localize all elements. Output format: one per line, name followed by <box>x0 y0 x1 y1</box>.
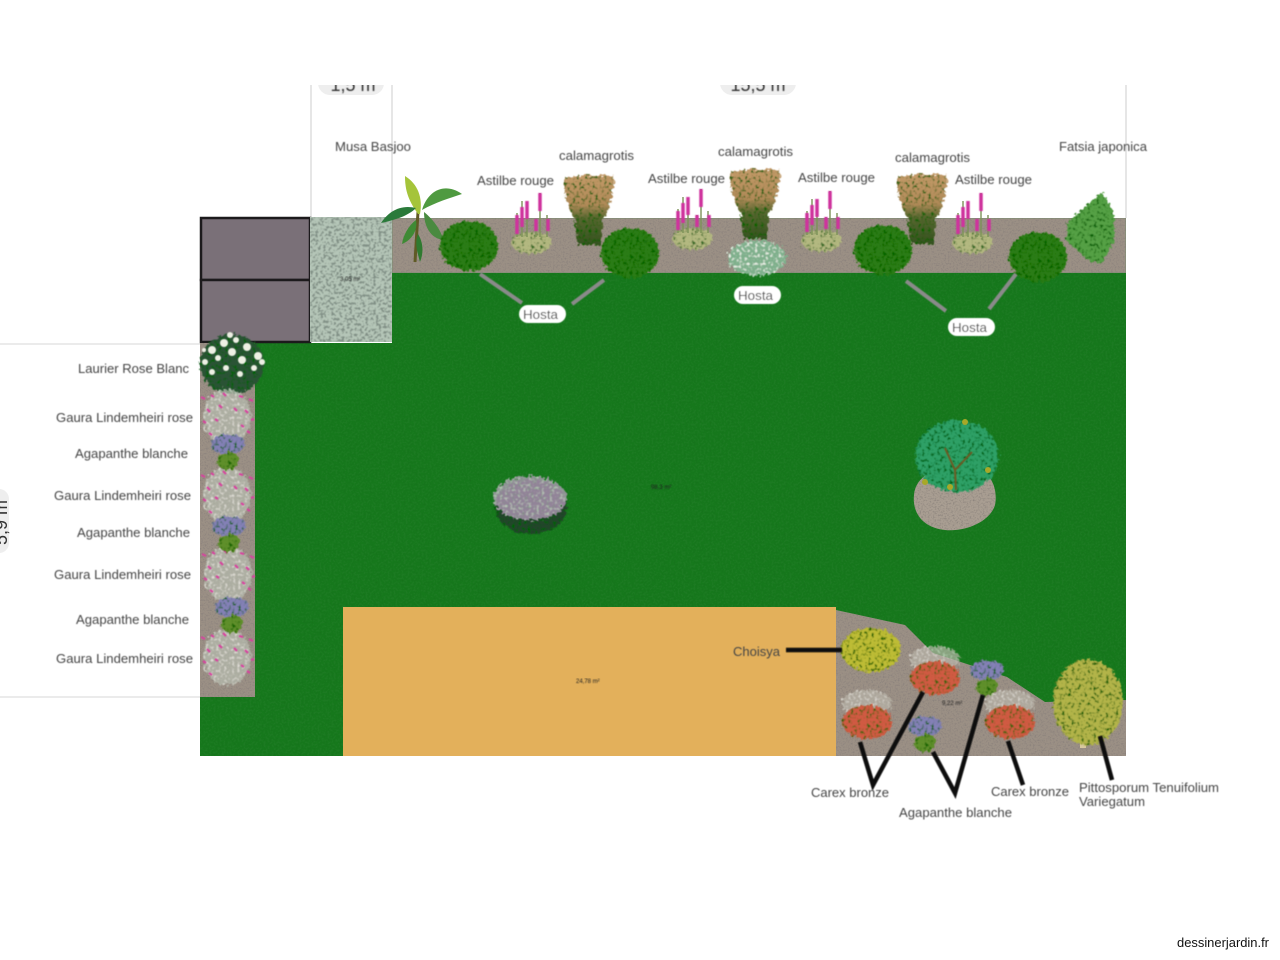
lower right gravel bed: 9,22 m² <box>942 701 962 707</box>
panel: terrace: 24,78 m² <box>576 679 600 685</box>
hosta label 1 <box>519 305 566 323</box>
dimension lines and labels <box>0 70 1126 697</box>
icon: carex 2 <box>910 646 960 695</box>
icon: carex 1 <box>842 690 892 739</box>
icon: astilbe 4 <box>952 193 992 254</box>
black leader lines <box>786 650 1112 793</box>
watermark: dessinerjardin.fr <box>1177 936 1269 950</box>
panel: pebble path <box>310 217 392 342</box>
plant name labels: Astilbe rouge <box>798 170 875 185</box>
icon: laurier rose <box>200 332 265 394</box>
icon: pale hosta <box>728 240 786 276</box>
icon: astilbe 2 <box>672 189 712 250</box>
plant name labels: Choisya <box>733 644 781 659</box>
dimension lines and labels: 15,5 m <box>730 75 786 95</box>
icon: agapanthe 5 <box>908 716 942 752</box>
hosta label 2 <box>734 286 781 304</box>
top gravel bed <box>392 218 1126 273</box>
plant name labels: Gaura Lindemheiri rose <box>54 567 191 582</box>
plant name labels: Pittosporum Tenuifolium <box>1079 780 1219 795</box>
icon: agapanthe 3 <box>215 597 249 633</box>
plant name labels: Variegatum <box>1079 794 1145 809</box>
icon: hosta 3 <box>854 225 912 275</box>
icon: calamagrostis 3 <box>897 174 947 244</box>
dimension lines and labels: 1,5 m <box>330 75 376 95</box>
plant name labels: Laurier Rose Blanc <box>78 361 189 376</box>
plant name labels: calamagrotis <box>718 144 794 159</box>
icon: hosta 2 <box>601 228 659 278</box>
plant name labels: Astilbe rouge <box>648 171 725 186</box>
icon: lilac shrub <box>493 476 567 534</box>
panel: grey sheds <box>201 218 310 342</box>
hosta label 3: Hosta <box>952 320 988 335</box>
icon: hosta 4 <box>1009 232 1067 282</box>
icon: tree on lawn <box>915 419 999 492</box>
plant name labels: Musa Basjoo <box>335 139 411 154</box>
plant name labels: Agapanthe blanche <box>75 446 188 461</box>
icon: calamagrostis 2 <box>730 169 780 239</box>
hosta label 3 <box>948 318 995 336</box>
icon: hosta 1 <box>440 221 498 271</box>
plant name labels: Gaura Lindemheiri rose <box>54 488 191 503</box>
icon: gaura 4 <box>201 629 254 685</box>
plant name labels: Astilbe rouge <box>477 173 554 188</box>
icon: gaura 3 <box>202 546 255 602</box>
panel: pebble path: 3,05 m² <box>340 277 360 283</box>
plant name labels: Carex bronze <box>991 784 1069 799</box>
icon: agapanthe 4 <box>970 660 1004 696</box>
icon: calamagrostis 1 <box>564 175 614 245</box>
icon: agapanthe 1 <box>211 434 245 470</box>
icon: choisya <box>841 628 901 672</box>
tree gravel circle <box>914 466 996 530</box>
plant name labels: Fatsia japonica <box>1059 139 1148 154</box>
lawn <box>200 273 1126 756</box>
plant name labels <box>54 139 1219 820</box>
plant name labels: Carex bronze <box>811 785 889 800</box>
icon: astilbe 1 <box>511 193 551 254</box>
icon: gaura 2 <box>201 467 254 523</box>
icon: agapanthe 2 <box>212 516 246 552</box>
left gravel bed <box>200 343 255 697</box>
plant name labels: Agapanthe blanche <box>899 805 1012 820</box>
plant name labels: Agapanthe blanche <box>77 525 190 540</box>
plant name labels: Gaura Lindemheiri rose <box>56 410 193 425</box>
plant name labels: calamagrotis <box>559 148 635 163</box>
icon: pittosporum <box>1053 659 1123 748</box>
plant name labels: calamagrotis <box>895 150 971 165</box>
plant name labels: Gaura Lindemheiri rose <box>56 651 193 666</box>
lawn area label: 98,3 m² <box>651 485 671 491</box>
hosta label 2: Hosta <box>738 288 774 303</box>
icon: carex 3 <box>985 690 1035 739</box>
icon: astilbe 3 <box>801 191 841 252</box>
plant name labels: Agapanthe blanche <box>76 612 189 627</box>
lower right gravel bed <box>836 610 1126 756</box>
icon: musa basjoo banana <box>381 176 462 262</box>
panel: terrace <box>343 607 836 756</box>
plant name labels: Astilbe rouge <box>955 172 1032 187</box>
hosta label 1: Hosta <box>523 307 559 322</box>
icon: gaura 1 <box>201 389 254 445</box>
grey leader lines <box>480 274 1016 311</box>
icon: fatsia japonica <box>1066 192 1114 262</box>
